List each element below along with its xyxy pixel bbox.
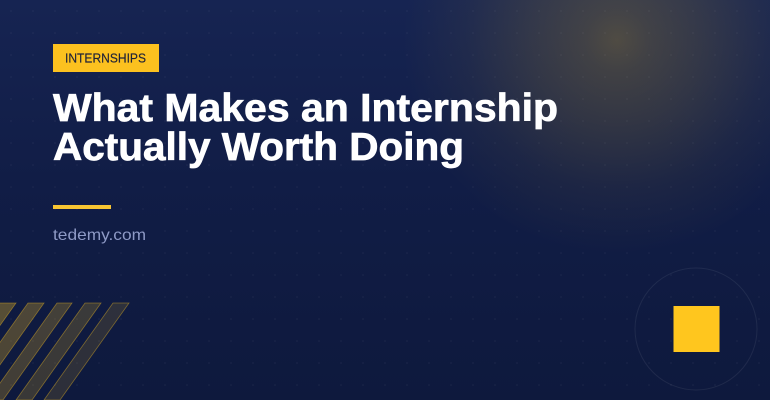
title: Actually Worth Doing — [53, 126, 464, 169]
title — [53, 87, 558, 169]
category tag: INTERNSHIPS — [65, 50, 146, 66]
category tag — [53, 44, 159, 72]
title: What Makes an Internship — [53, 87, 558, 130]
accent divider — [53, 205, 111, 209]
site url: tedemy.com — [53, 227, 146, 244]
circle outline — [635, 268, 757, 390]
yellow square — [674, 306, 720, 352]
diagonal stripes — [0, 303, 129, 400]
